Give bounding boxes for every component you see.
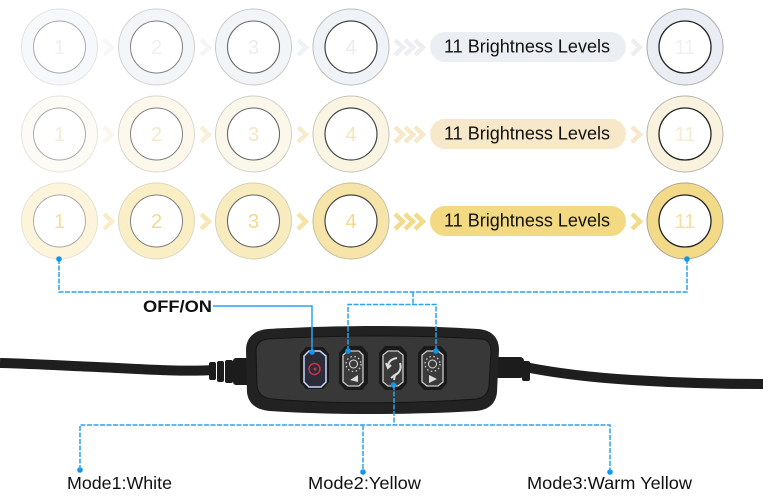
button: mode — [379, 346, 407, 390]
ring 3 white: 3 — [248, 37, 259, 59]
ring 2 warm: 2 — [151, 211, 162, 233]
row 3 pill — [430, 206, 626, 236]
connector: modes — [80, 385, 610, 472]
ring 1 warm: 1 — [54, 211, 65, 233]
row 1 pill — [430, 32, 626, 62]
ring 4 warm: 4 — [345, 211, 357, 233]
row 1 pill: 11 Brightness Levels — [444, 36, 610, 56]
button: brightness up — [418, 346, 447, 390]
ring 3 yellow: 3 — [248, 124, 259, 146]
ring 4 white: 4 — [345, 37, 357, 59]
ring 3 warm — [216, 183, 292, 259]
ring 1 white — [22, 9, 98, 85]
row 3 chevrons — [104, 214, 640, 229]
ring 11 white — [647, 9, 723, 85]
ring 2 white: 2 — [151, 37, 162, 59]
ring 2 yellow: 2 — [151, 124, 162, 146]
row 3: warm yellow brightness levels — [22, 183, 723, 259]
ring 3 white — [216, 9, 292, 85]
strain relief left — [209, 358, 251, 385]
ring 3 warm: 3 — [248, 211, 259, 233]
controller body — [246, 326, 499, 414]
connector dots — [56, 256, 690, 475]
cable left — [0, 363, 215, 371]
ring 11 warm — [647, 183, 723, 259]
row 2 pill — [430, 119, 626, 149]
ring 4 yellow — [313, 96, 389, 172]
connector: rings to controller — [59, 259, 687, 351]
ring 11 white: 11 — [675, 37, 695, 59]
ring 2 white — [118, 9, 194, 85]
button: brightness down — [339, 346, 368, 390]
mode 2 label: Mode2:Yellow — [308, 473, 421, 493]
ring 11 yellow: 11 — [675, 124, 695, 146]
ring 2 yellow — [118, 96, 194, 172]
ring 11 yellow — [647, 96, 723, 172]
ring 1 white: 1 — [54, 37, 65, 59]
ring 2 warm — [118, 183, 194, 259]
mode 1 label: Mode1:White — [67, 473, 172, 493]
mode 3 label: Mode3:Warm Yellow — [527, 473, 692, 493]
ring 4 warm — [313, 183, 389, 259]
row 2: yellow brightness levels — [22, 96, 723, 172]
OFF/ON label: OFF/ON — [143, 297, 212, 316]
ring 4 white — [313, 9, 389, 85]
button: power — [300, 347, 329, 389]
ring 3 yellow — [216, 96, 292, 172]
OFF/ON label — [143, 297, 312, 352]
ring 4 yellow: 4 — [345, 124, 357, 146]
row 3 pill: 11 Brightness Levels — [444, 210, 610, 230]
cable right — [525, 367, 763, 384]
ring 1 warm — [22, 183, 98, 259]
row 1 chevrons — [104, 40, 640, 55]
ring 1 yellow: 1 — [54, 124, 65, 146]
strain relief right — [492, 357, 530, 381]
ring 11 warm: 11 — [675, 211, 695, 233]
row 2 pill: 11 Brightness Levels — [444, 124, 610, 144]
ring 1 yellow — [22, 96, 98, 172]
row 1: white brightness levels — [22, 9, 723, 85]
row 2 chevrons — [104, 127, 640, 142]
